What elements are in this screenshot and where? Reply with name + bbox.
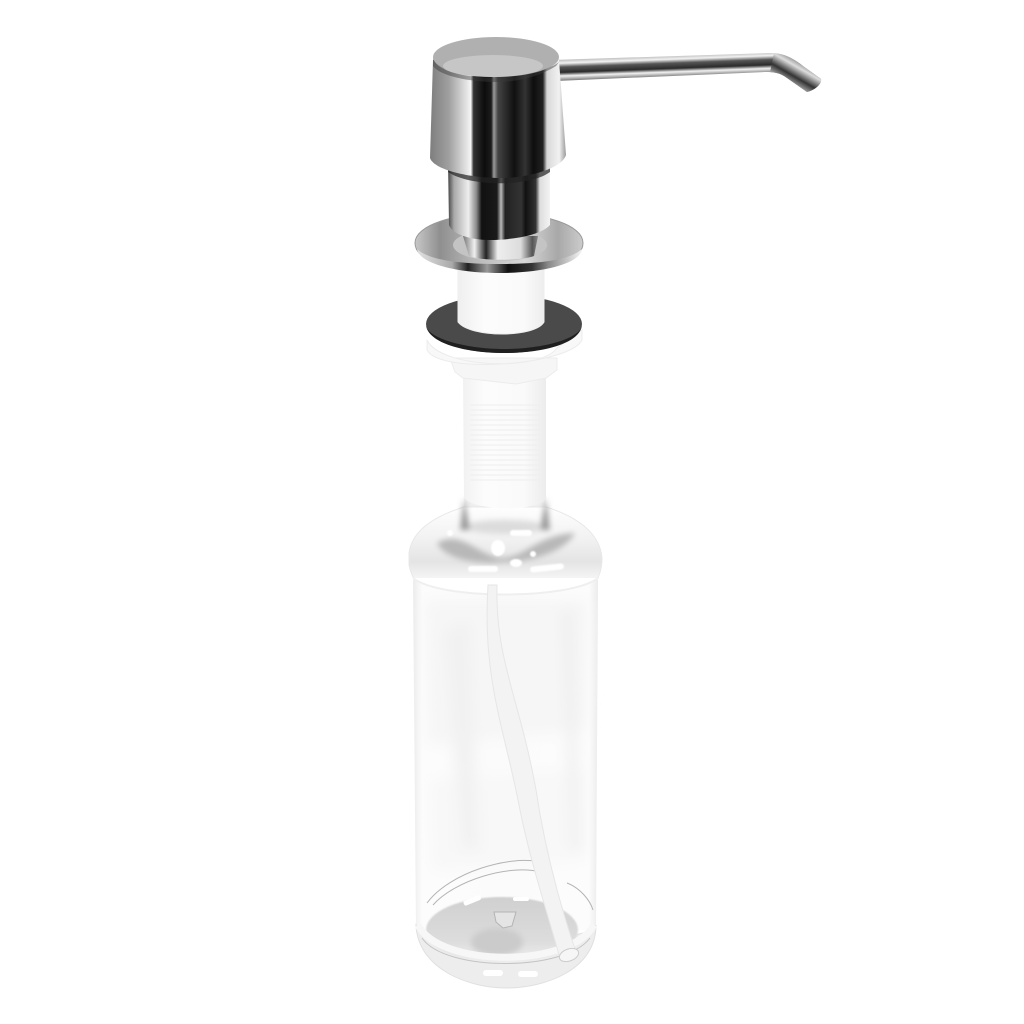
upper white thread	[458, 268, 544, 334]
bottle body	[413, 580, 598, 930]
bottle	[409, 497, 602, 988]
threaded shank	[426, 268, 582, 508]
bottle body highlight bands	[425, 600, 588, 870]
shoulder shading	[437, 498, 575, 563]
cap top face	[433, 37, 559, 77]
base inner ellipse	[426, 897, 578, 963]
cap top rim shadow	[433, 58, 559, 82]
inner neck	[463, 236, 538, 260]
spout	[552, 53, 821, 92]
bottle shoulder	[409, 507, 602, 586]
base ring	[418, 925, 594, 957]
collar	[448, 160, 550, 240]
white washer	[427, 330, 582, 364]
cap	[430, 37, 566, 178]
bottle neck	[464, 497, 547, 535]
shoulder ring line	[413, 578, 598, 594]
flange	[415, 213, 583, 273]
bottle grooves	[427, 860, 593, 910]
flange inner well	[453, 229, 547, 261]
dip tube	[487, 585, 580, 964]
flange rim	[417, 249, 582, 273]
shoulder highlights	[447, 530, 564, 573]
shank tube	[463, 378, 546, 508]
recycling mark	[494, 912, 516, 928]
base highlights	[463, 895, 538, 977]
collar shadow	[448, 165, 550, 183]
metal pump	[415, 37, 821, 273]
hex nut	[450, 358, 557, 384]
shank thread lines	[470, 405, 540, 480]
base dome	[471, 928, 523, 956]
bottle base	[416, 925, 596, 988]
black gasket	[426, 295, 582, 353]
